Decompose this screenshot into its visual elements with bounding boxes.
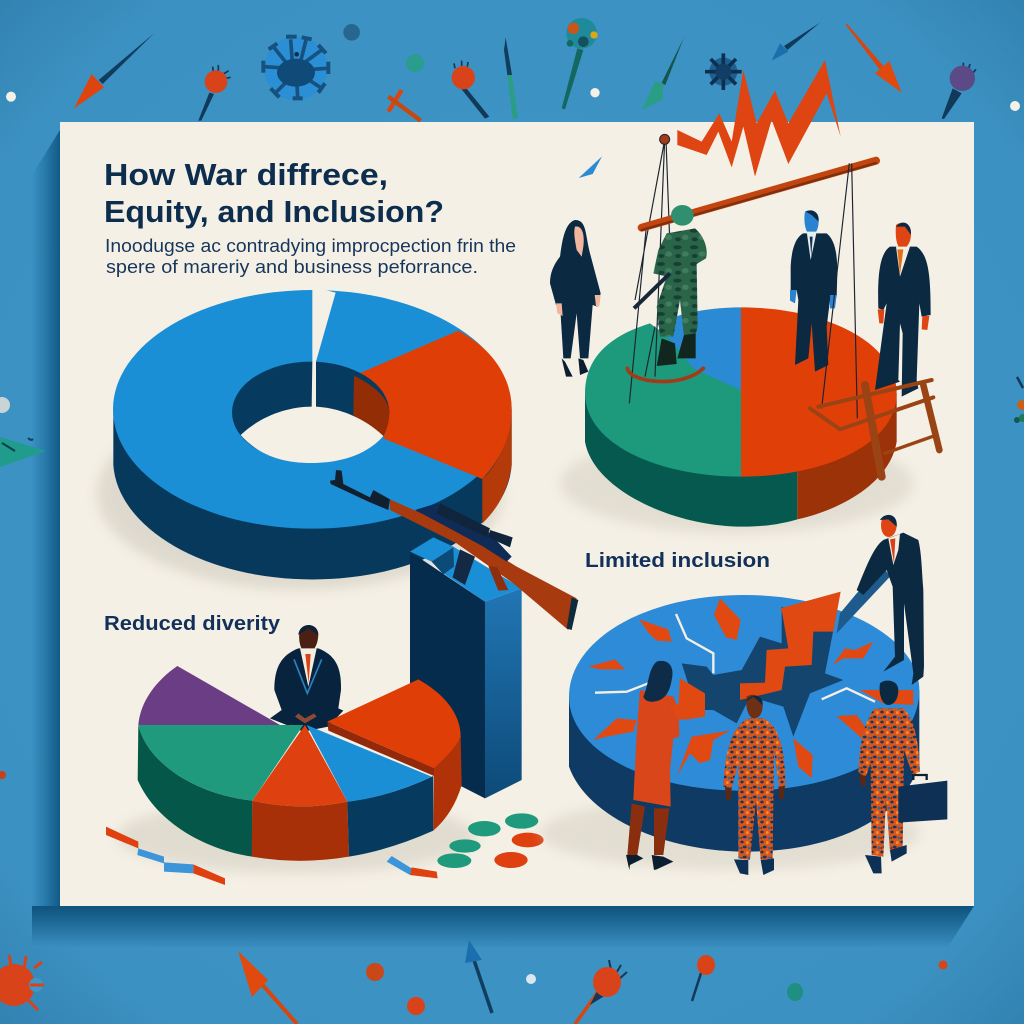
icon: grey dot (0, 397, 10, 413)
pie side green (138, 725, 252, 857)
woman (550, 220, 601, 377)
seated man (270, 625, 343, 732)
icon: briefcase (898, 775, 947, 823)
top left border icons (6, 24, 518, 121)
scale strings left (629, 140, 672, 403)
pillar right face (485, 588, 522, 798)
icon: small flower (407, 997, 425, 1015)
shadow (540, 797, 920, 870)
intro text: Inoodugse ac contradying improcpection frin the (105, 235, 516, 256)
icon: green and navy arrow (504, 37, 518, 118)
icon: speckled small virus (343, 24, 360, 41)
icon: pivot ball (660, 134, 670, 144)
swing plank and ladder (810, 380, 939, 477)
panel shadow (32, 130, 974, 947)
blue face (657, 307, 741, 390)
pie side green (585, 393, 797, 527)
donut side (113, 409, 512, 579)
icon: multicolour flower (562, 18, 598, 109)
green wedge (138, 725, 303, 801)
icon: teal dot (406, 54, 424, 72)
icon: orange arrow bottom (238, 951, 297, 1024)
icon: dot bottom right (938, 960, 948, 970)
swing left (627, 368, 703, 382)
cream panel (60, 122, 974, 906)
icon: white dot (6, 92, 16, 102)
icon: virus small dark (705, 53, 742, 90)
pie top (569, 595, 919, 791)
orange stair arrow (740, 592, 841, 700)
blue wedge (307, 725, 432, 802)
pillar top (410, 537, 522, 602)
icon: rifle (330, 470, 578, 630)
hole floor (241, 407, 383, 463)
shadow (117, 800, 477, 873)
shadow (97, 397, 503, 590)
intro text (105, 235, 516, 277)
right orange wedge edge (327, 722, 434, 776)
pie side orange (797, 393, 897, 519)
chart: large donut pie (97, 287, 512, 590)
label: limited inclusion: Limited inclusion (585, 549, 770, 572)
right side orange (482, 409, 512, 523)
icon: orange arrow (846, 23, 902, 93)
chart: cracked pie (540, 515, 947, 875)
icon: arrow top left (74, 33, 154, 108)
icon: purple flower (942, 63, 976, 119)
icon: white dot right (1010, 101, 1020, 111)
intro text: spere of mareriy and business peforrance. (106, 256, 478, 277)
green face (585, 323, 741, 477)
man orange face (875, 223, 931, 397)
icon: blue shard (579, 156, 602, 178)
soldier middle camo (723, 695, 785, 875)
side icons (0, 101, 1024, 779)
pie side orange (252, 801, 349, 861)
chips (437, 813, 544, 868)
beam (642, 161, 876, 230)
icon: flower red (198, 65, 231, 121)
hole orange wall (353, 376, 389, 437)
orange face (741, 307, 897, 477)
orange wedge (354, 331, 512, 479)
right orange wedge (327, 679, 461, 768)
icon: red dot (0, 771, 6, 779)
purple wedge (138, 666, 280, 725)
donut top face (113, 290, 512, 529)
title (104, 157, 444, 229)
pie side (569, 690, 919, 852)
white crack lines (595, 614, 875, 702)
icon: blue arrow bottom (465, 940, 492, 1013)
icon: orange dot (366, 963, 384, 981)
slit (312, 287, 336, 407)
crack (682, 607, 843, 737)
zigzag red arrow (677, 60, 841, 177)
icon: virus large (263, 37, 328, 100)
chart: lower left pie (106, 625, 544, 885)
broken bar right (387, 856, 438, 878)
pillar (410, 537, 522, 798)
label: reduced diversity: Reduced diverity (104, 612, 281, 635)
hole inner wall (232, 362, 389, 463)
broken bar left (106, 827, 225, 885)
title: Equity, and Inclusion? (104, 194, 444, 229)
shadow (560, 433, 913, 533)
soldier (634, 205, 707, 366)
right side orange (433, 737, 462, 831)
woman in red dress (626, 661, 705, 870)
pillar left face (410, 552, 485, 798)
icon: flower bottom (575, 960, 627, 1024)
title: How War diffrece, (104, 157, 388, 192)
icon: small red cross arrow (388, 90, 421, 121)
chart: upper right pie with scale (550, 60, 939, 533)
icon: orange virus (0, 955, 44, 1010)
icon: white dot bottom (526, 974, 536, 984)
man pressing (837, 515, 924, 685)
icon: flower small bottom (692, 955, 715, 1001)
icon: teal dot bottom (787, 983, 803, 1001)
icon: green arrow (642, 37, 684, 110)
middle orange wedge (252, 725, 347, 806)
top right border icons (562, 18, 976, 119)
pie side blue (347, 776, 433, 857)
bottom border icons (0, 940, 948, 1024)
scale strings right (822, 163, 857, 418)
icon: flower orange (452, 61, 489, 119)
icon: blue arrow (772, 23, 820, 61)
man blue face (790, 210, 837, 372)
icon: right edge flower (1014, 377, 1024, 423)
orange shards (588, 598, 913, 778)
soldier right camo (858, 681, 920, 873)
icon: white dot (590, 88, 600, 97)
icon: green arrow left (0, 437, 46, 467)
